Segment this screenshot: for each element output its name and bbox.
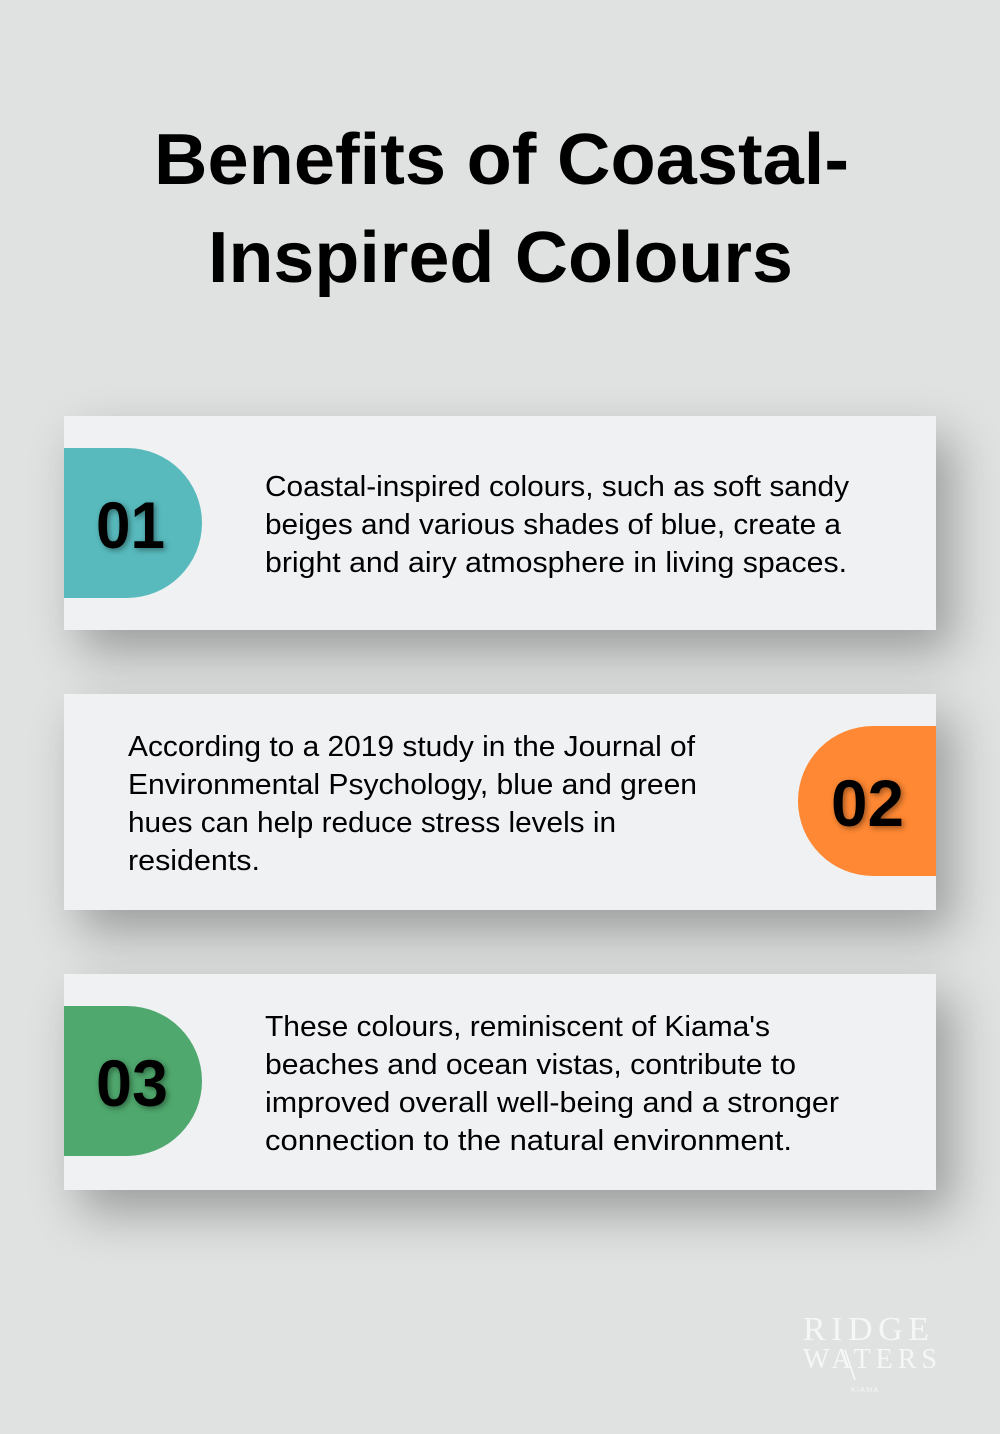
title <box>154 120 849 298</box>
panel: card 03 <box>64 974 936 1190</box>
card 01 number and text: 01 <box>96 488 165 562</box>
title: Benefits of Coastal- <box>154 120 849 200</box>
card 03 number and text: These colours, reminiscent of Kiama's <box>265 1011 770 1043</box>
card 01 number and text: Coastal-inspired colours, such as soft sandy <box>265 471 850 503</box>
card 02 number and text: hues can help reduce stress levels in <box>128 807 616 839</box>
logo: Ridge Waters Kiama: RIDGE <box>803 1311 929 1348</box>
card 03 number and text: beaches and ocean vistas, contribute to <box>265 1049 796 1081</box>
card 02 number and text: residents. <box>128 845 260 877</box>
logo: Ridge Waters Kiama: WATERS <box>803 1344 937 1375</box>
card 01 number and text: beiges and various shades of blue, create a <box>265 509 842 541</box>
card 03 number and text: 03 <box>96 1046 168 1120</box>
card 02 number and text <box>128 731 907 877</box>
card 02 number and text: According to a 2019 study in the Journal of <box>128 731 696 763</box>
badge: 01 <box>64 448 202 598</box>
badge: 02 <box>798 726 936 876</box>
card 02 number and text: Environmental Psychology, blue and green <box>128 769 697 801</box>
card 03 number and text: improved overall well-being and a stronger <box>265 1087 839 1119</box>
title: Inspired Colours <box>208 218 793 298</box>
card 03 number and text: connection to the natural environment. <box>265 1125 792 1157</box>
panel: card 01 <box>64 416 936 630</box>
card 02 number and text: 02 <box>831 766 904 840</box>
badge: 03 <box>64 1006 202 1156</box>
card 01 number and text: bright and airy atmosphere in living spaces. <box>265 547 847 579</box>
panel: card 02 <box>64 694 936 910</box>
card 01 number and text <box>96 471 850 579</box>
logo: Ridge Waters Kiama: KIAMA <box>851 1387 878 1394</box>
